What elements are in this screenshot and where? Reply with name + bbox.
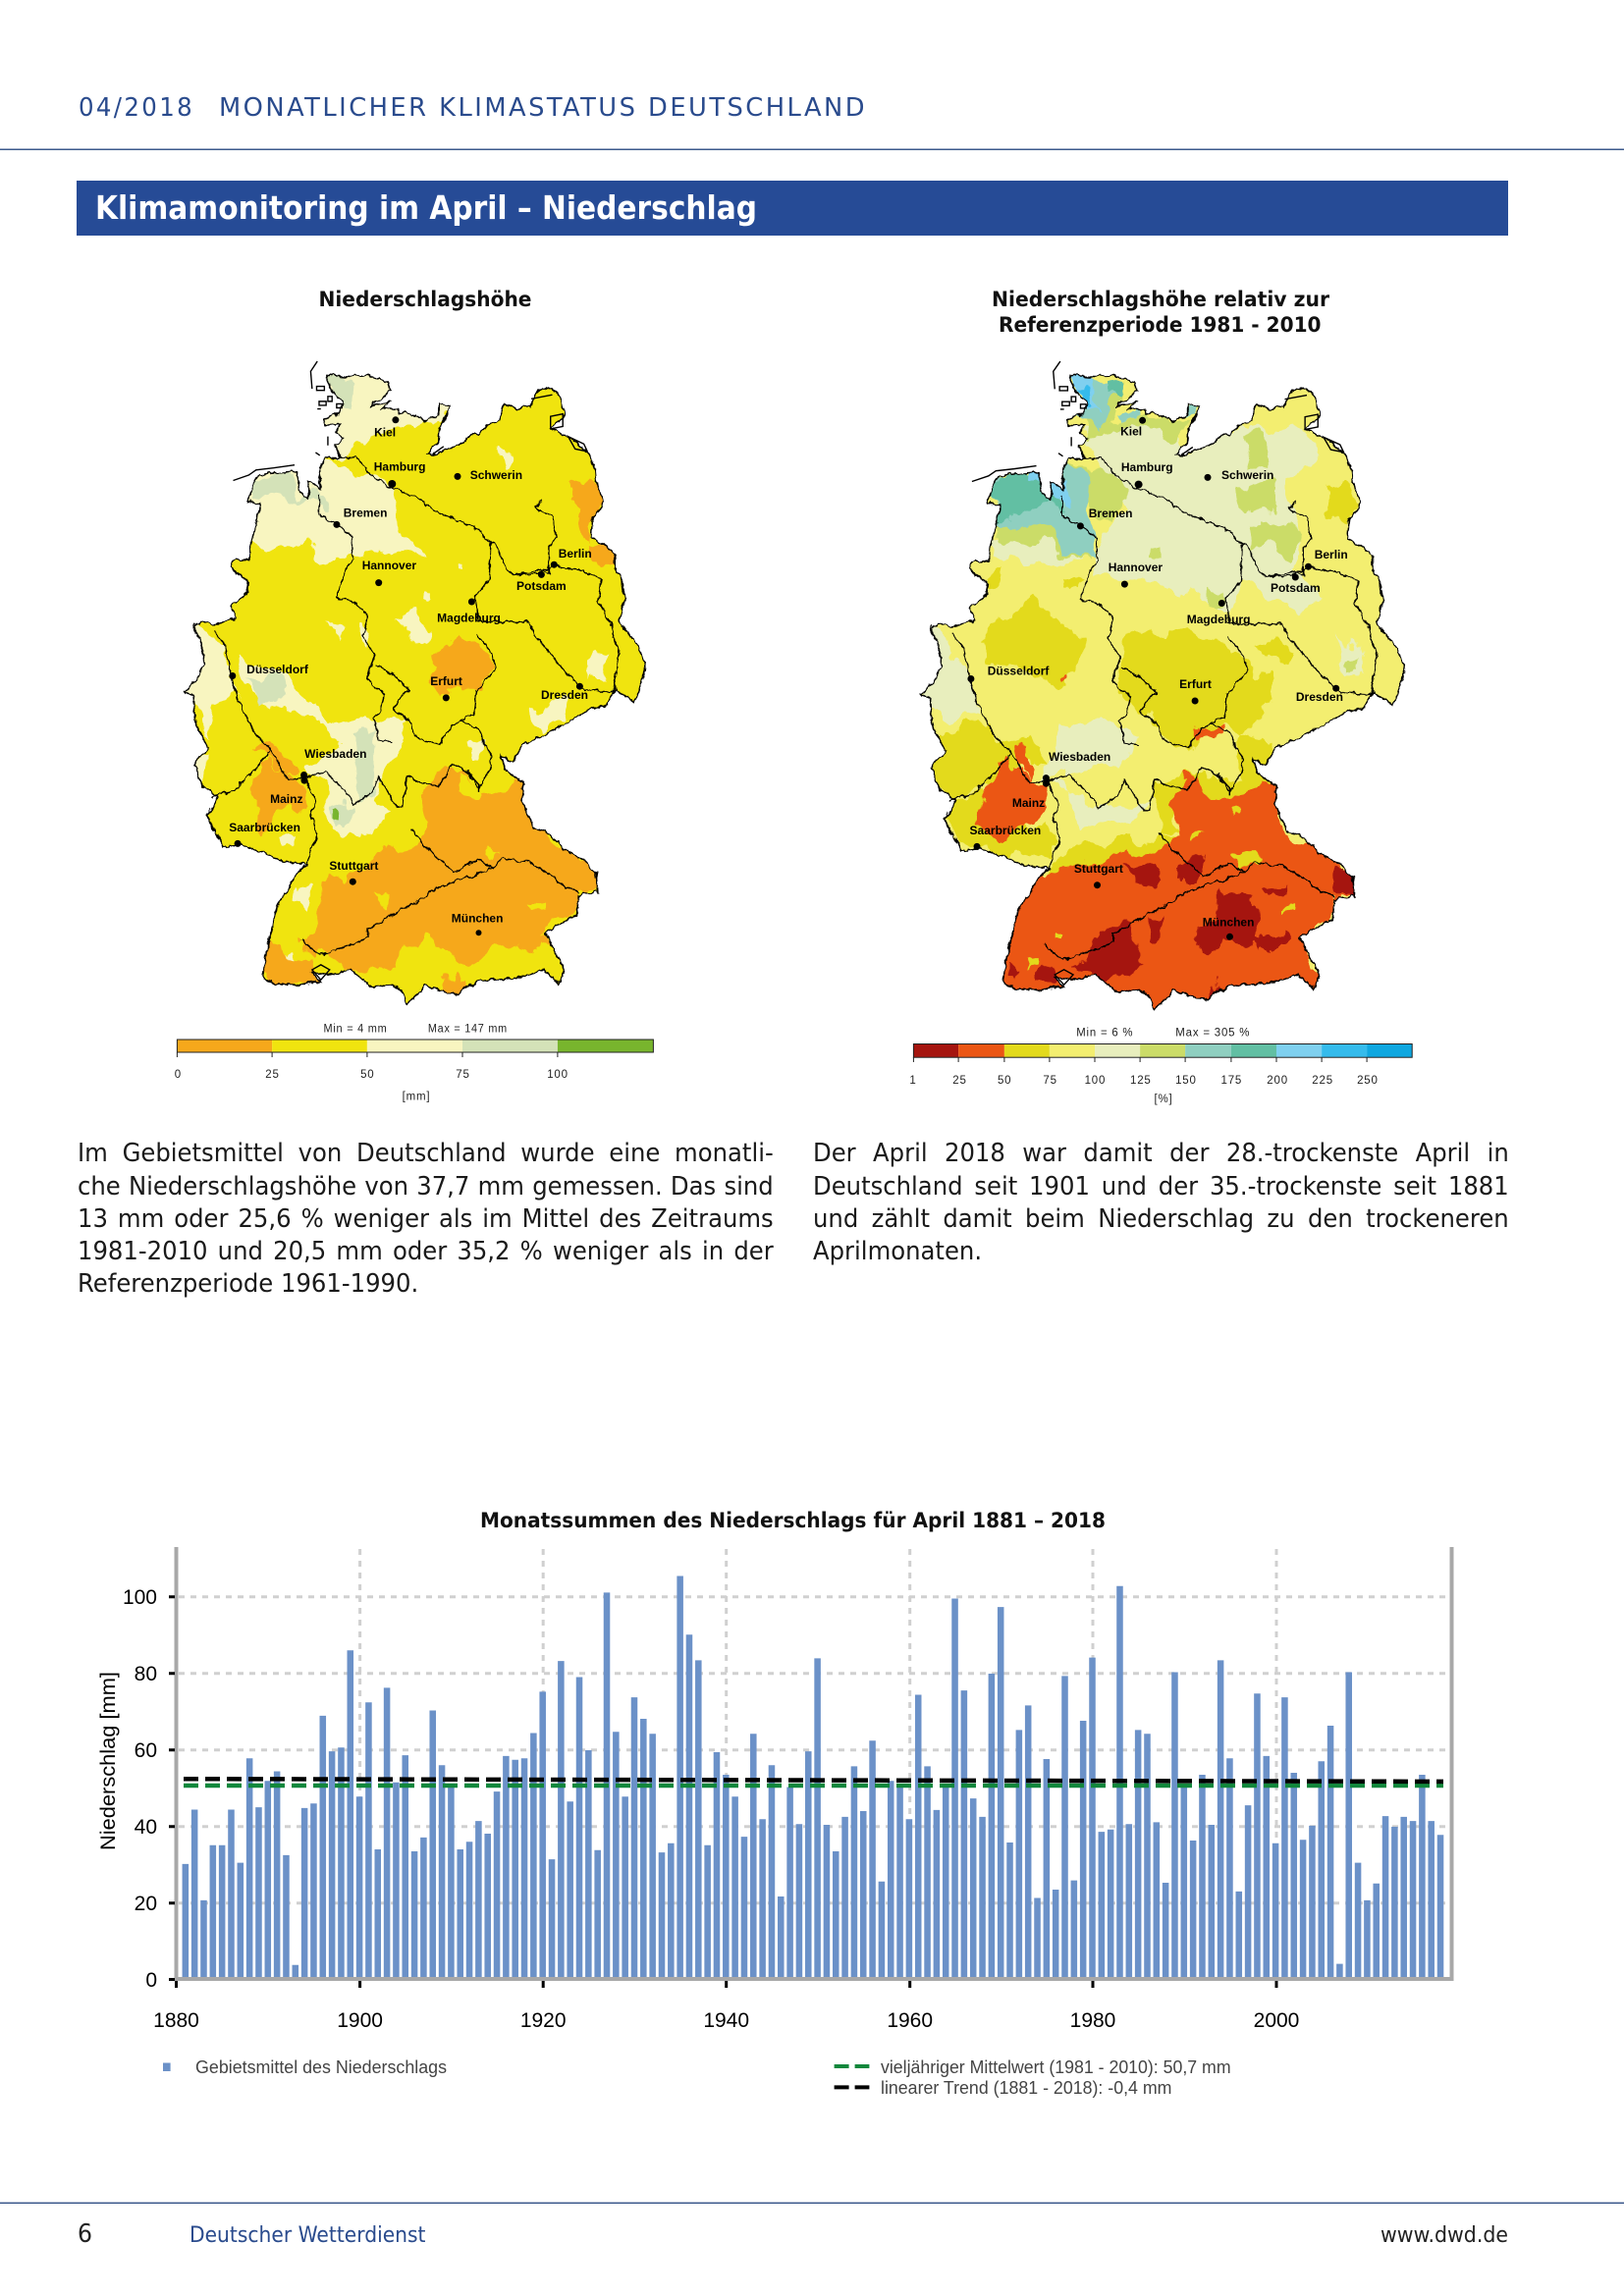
outline: national border <box>186 375 645 1005</box>
bars: yearly area mean precipitation <box>186 1576 1440 1980</box>
text block: right column: Deutschland seit 1901 und der 35.-trockenste seit 1881 <box>813 1172 1509 1201</box>
text block: left column: 13 mm oder 25,6 % weniger als im Mittel des Zeitraums <box>78 1204 774 1234</box>
map: precipitation relative to reference period: Potsdam <box>1271 581 1321 595</box>
map: precipitation amount: Hamburg <box>374 459 425 473</box>
legend: right map colour scale: 25 <box>952 1075 967 1087</box>
heading: right map title <box>992 288 1330 337</box>
text block: left column: che Niederschlagshöhe von 37,7 mm gemessen. Das sind <box>78 1172 774 1201</box>
legend: right map colour scale: 175 <box>1221 1075 1242 1087</box>
map: precipitation amount: Mainz <box>270 792 302 806</box>
map: precipitation amount: Düsseldorf <box>246 663 309 676</box>
heading: right map title: Niederschlagshöhe relativ zur <box>992 288 1330 311</box>
page header: issue and publication title: MONATLICHER KLIMASTATUS DEUTSCHLAND <box>219 93 867 123</box>
text block: left column: 1981-2010 und 20,5 mm oder 35,2 % weniger als in der <box>78 1237 774 1266</box>
map: precipitation amount: Dresden <box>541 688 588 702</box>
map: precipitation relative to reference period: Düsseldorf <box>988 664 1050 677</box>
chart legend <box>163 2056 1231 2098</box>
outline: national border <box>922 375 1404 1010</box>
section heading bar: Klimamonitoring im April – Niederschlag <box>95 188 757 227</box>
legend: right map colour scale: Min = 6 % <box>1076 1027 1133 1039</box>
page footer: www.dwd.de <box>1380 2223 1508 2248</box>
page footer: Deutscher Wetterdienst <box>189 2223 426 2248</box>
text block: right column: Der April 2018 war damit der 28.-trockenste April in <box>813 1139 1509 1168</box>
y axis labels: 100 <box>123 1586 157 1609</box>
map: precipitation amount <box>183 361 646 1005</box>
legend: right map colour scale: 225 <box>1312 1075 1333 1087</box>
map: precipitation relative to reference period: Magdeburg <box>1187 613 1250 626</box>
legend: right map colour scale: 50 <box>998 1075 1011 1087</box>
x axis labels: 1880 <box>153 2009 199 2032</box>
text block: left column: Im Gebietsmittel von Deutschland wurde eine monatli- <box>78 1139 774 1168</box>
heading: chart title: Monatssummen des Niederschlags für April 1881 – 2018 <box>480 1509 1106 1532</box>
map: precipitation relative to reference period: Berlin <box>1315 548 1348 561</box>
legend: right map colour scale <box>909 1027 1412 1105</box>
heading: left map title: Niederschlagshöhe <box>318 288 532 311</box>
legend: left map colour scale: Min = 4 mm <box>324 1024 387 1036</box>
legend: left map colour scale: [mm] <box>403 1092 430 1103</box>
map: precipitation relative to reference period: Dresden <box>1296 690 1343 704</box>
map: precipitation amount: München <box>452 911 503 925</box>
map: precipitation amount: Saarbrücken <box>229 821 300 834</box>
map: precipitation amount: Bremen <box>344 507 387 520</box>
legend: left map colour scale: 100 <box>547 1069 568 1081</box>
line: long-term mean <box>184 1784 1443 1788</box>
map: precipitation relative to reference period: Saarbrücken <box>970 824 1041 837</box>
x axis labels: 2000 <box>1254 2009 1299 2032</box>
legend: right map colour scale: [%] <box>1154 1094 1173 1105</box>
x axis labels <box>153 2009 1299 2032</box>
chart legend: Gebietsmittel des Niederschlags <box>195 2056 447 2077</box>
y axis labels: 80 <box>135 1663 157 1685</box>
axes <box>177 1547 1451 1979</box>
map: precipitation amount: Magdeburg <box>437 611 501 624</box>
legend: left map colour scale: 0 <box>175 1069 182 1081</box>
text block: left column <box>78 1139 774 1299</box>
map: precipitation relative to reference period: Stuttgart <box>1074 862 1123 876</box>
map: precipitation relative to reference period: Bremen <box>1089 507 1132 520</box>
map: precipitation relative to reference period: Wiesbaden <box>1049 750 1110 764</box>
line: linear trend <box>184 1779 1443 1782</box>
x axis labels: 1900 <box>337 2009 383 2032</box>
map: precipitation relative to reference period: Hamburg <box>1121 460 1173 474</box>
map: precipitation relative to reference period: München <box>1203 916 1254 930</box>
heading: right map title: Referenzperiode 1981 - 2010 <box>999 313 1322 337</box>
legend: left map colour scale: 50 <box>360 1069 375 1081</box>
legend: right map colour scale: 250 <box>1357 1075 1379 1087</box>
x axis labels: 1980 <box>1070 2009 1115 2032</box>
map: precipitation amount: Schwerin <box>470 468 522 482</box>
page header: issue and publication title: 04/2018 <box>79 93 194 123</box>
map: precipitation relative to reference period <box>919 361 1406 1011</box>
x axis labels: 1940 <box>703 2009 749 2032</box>
legend: right map colour scale: 75 <box>1043 1075 1057 1087</box>
y axis labels: 60 <box>135 1739 157 1762</box>
text block: right column: Aprilmonaten. <box>813 1237 982 1266</box>
map: precipitation relative to reference period: Erfurt <box>1179 677 1212 691</box>
legend: right map colour scale: 1 <box>909 1075 917 1087</box>
section heading bar <box>77 181 1508 236</box>
x axis labels: 1960 <box>887 2009 933 2032</box>
page footer <box>0 2203 1624 2249</box>
text block: right column: und zählt damit beim Niederschlag zu den trockeneren <box>813 1204 1509 1234</box>
map: precipitation amount: Erfurt <box>430 674 462 688</box>
y axis labels: 20 <box>135 1893 157 1915</box>
map: precipitation amount: Kiel <box>374 426 396 440</box>
legend: left map colour scale <box>175 1024 653 1103</box>
page footer: 6 <box>78 2219 92 2249</box>
y axis labels <box>123 1586 157 1992</box>
text block: right column <box>813 1139 1509 1266</box>
chart legend: linearer Trend (1881 - 2018): -0,4 mm <box>881 2077 1172 2098</box>
x axis labels: 1920 <box>520 2009 567 2032</box>
y axis title: Niederschlag [mm] <box>97 1672 120 1850</box>
y axis labels: 0 <box>145 1969 157 1992</box>
legend: right map colour scale: 100 <box>1085 1075 1106 1087</box>
legend: right map colour scale: 200 <box>1267 1075 1288 1087</box>
map: precipitation relative to reference period: Schwerin <box>1221 468 1273 482</box>
map: precipitation relative to reference period: Hannover <box>1109 561 1163 574</box>
legend: right map colour scale: 150 <box>1175 1075 1197 1087</box>
map: precipitation amount: Stuttgart <box>329 859 378 873</box>
legend: left map colour scale: 25 <box>265 1069 280 1081</box>
legend: left map colour scale: 75 <box>456 1069 470 1081</box>
chart legend: vieljähriger Mittelwert (1981 - 2010): 50,7 mm <box>881 2056 1231 2077</box>
legend: left map colour scale: Max = 147 mm <box>428 1024 508 1036</box>
map: precipitation relative to reference period: Mainz <box>1012 796 1045 810</box>
bar chart: April precipitation 1881-2018 <box>97 1547 1451 2032</box>
y axis labels: 40 <box>135 1816 157 1839</box>
legend: right map colour scale: 125 <box>1130 1075 1152 1087</box>
map: precipitation amount: Hannover <box>362 559 416 572</box>
text block: left column: Referenzperiode 1961-1990. <box>78 1269 419 1299</box>
legend: right map colour scale: Max = 305 % <box>1175 1027 1250 1039</box>
map: precipitation amount: Berlin <box>559 547 592 561</box>
map: precipitation amount: Potsdam <box>516 579 567 593</box>
map: precipitation amount: Wiesbaden <box>304 747 366 761</box>
map: precipitation relative to reference period: Kiel <box>1120 425 1142 439</box>
